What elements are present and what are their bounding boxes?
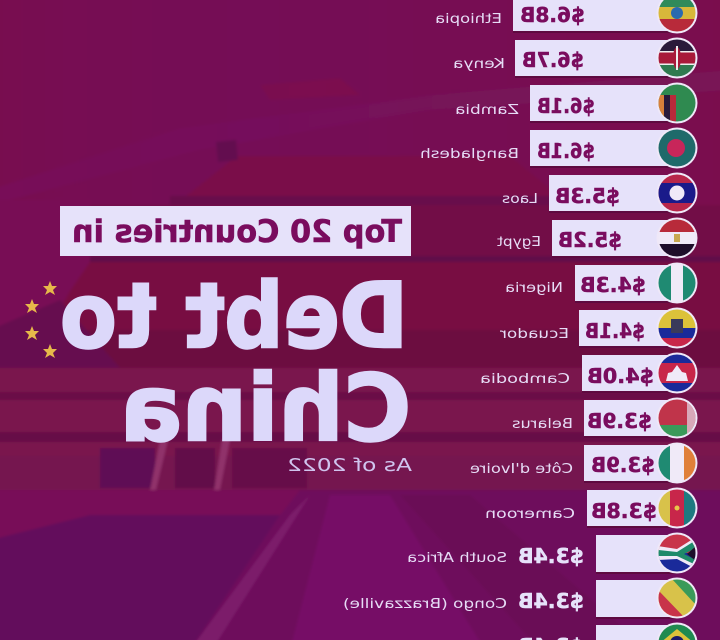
ground and road <box>0 490 720 640</box>
row: Bangladesh: Bangladesh <box>420 147 519 162</box>
row: Belarus: Belarus <box>512 417 573 432</box>
row: Belarus: $3.9B <box>587 409 652 433</box>
row: Cambodia: $4.0B <box>587 364 654 388</box>
title box: Top 20 Countries in <box>60 206 411 256</box>
row: Cambodia <box>480 352 698 394</box>
row: Congo (Brazzaville): $3.4B <box>518 589 584 613</box>
row: Cote d'Ivoire: $3.9B <box>591 453 655 477</box>
row: Ecuador: $4.1B <box>585 319 645 343</box>
row: Egypt: $5.2B <box>558 228 622 252</box>
row: Laos: Laos <box>502 192 538 207</box>
row: Egypt: Egypt <box>497 235 541 250</box>
title box: Top 20 Countries in: Top 20 Countries in <box>72 214 402 250</box>
row: Brazil <box>520 622 698 640</box>
row: Nigeria <box>505 262 698 304</box>
title: Debt to: Debt to <box>60 264 408 369</box>
row: Zambia: Zambia <box>455 103 519 118</box>
lower building <box>90 205 720 257</box>
row: Ethiopia <box>435 0 698 34</box>
icon: four gold stars <box>25 281 57 358</box>
row: Congo (Brazzaville): Congo (Brazzaville) <box>343 597 507 612</box>
row: Congo (Brazzaville) <box>343 578 698 618</box>
title: China: China <box>120 355 411 462</box>
row: Nigeria: Nigeria <box>505 281 563 296</box>
upper roof <box>175 156 570 205</box>
row: Cameroon: $3.8B <box>591 499 657 523</box>
row: Ecuador <box>499 308 698 348</box>
row: Ethiopia: $6.8B <box>520 3 585 27</box>
balustrades <box>0 368 720 490</box>
row: Egypt <box>497 218 698 258</box>
row: Cote d'Ivoire: Côte d'Ivoire <box>470 462 573 477</box>
row: Kenya: Kenya <box>453 57 505 72</box>
row: South Africa: $3.4B <box>518 544 584 568</box>
row: Nigeria: $4.3B <box>580 273 646 297</box>
row: Ecuador: Ecuador <box>499 327 569 342</box>
row: Laos: $5.3B <box>555 184 620 208</box>
row: Kenya <box>453 38 698 78</box>
row: Laos <box>502 172 698 214</box>
row: Bangladesh: $6.1B <box>537 139 595 163</box>
row: Ethiopia: Ethiopia <box>435 12 502 27</box>
row: Cameroon <box>485 488 698 528</box>
row: Kenya: $6.7B <box>522 48 584 72</box>
row: South Africa <box>407 532 698 574</box>
row: South Africa: South Africa <box>407 551 507 566</box>
row: Belarus <box>512 398 698 438</box>
subtitle: As of 2022: As of 2022 <box>287 455 412 476</box>
row: Bangladesh <box>420 128 698 168</box>
row: Zambia: $6.1B <box>537 94 595 118</box>
row: Zambia <box>455 82 698 124</box>
row: Cameroon: Cameroon <box>485 507 575 522</box>
row: Cote d'Ivoire <box>470 442 698 484</box>
row: Cambodia: Cambodia <box>480 372 570 387</box>
